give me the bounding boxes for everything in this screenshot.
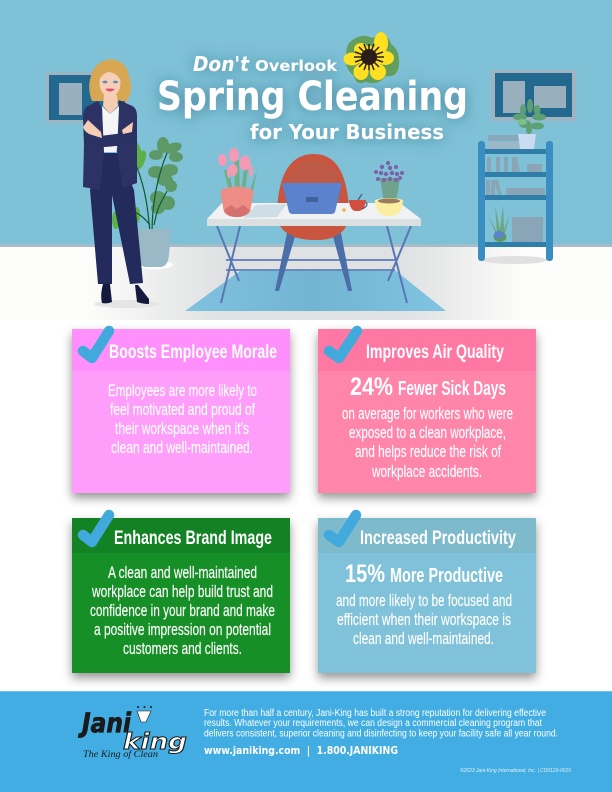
floor plant — [112, 137, 183, 269]
icon: laptop — [282, 183, 342, 214]
text block: a positive impression on potential — [94, 620, 271, 639]
text block: and helps reduce the risk of — [355, 442, 501, 461]
statistic — [345, 560, 503, 588]
room background — [0, 0, 612, 330]
company text: For more than half a century, Jani-King has built a strong reputation for delivering effective — [204, 708, 546, 719]
statistic: 24% — [350, 373, 393, 401]
face — [100, 69, 120, 97]
text block — [90, 563, 275, 658]
text block: workplace can help build trust and — [91, 582, 273, 601]
text block — [108, 381, 257, 457]
title: Overlook — [255, 57, 338, 75]
copyright: ©2023 Jani-King International, Inc. | CD0129-0015 — [460, 767, 571, 774]
panel header — [318, 329, 536, 371]
woman character — [83, 59, 160, 308]
statistic — [350, 373, 506, 401]
company text: delivers consistent, superior cleaning and disinfecting to keep your facility safe all year round. — [204, 728, 558, 740]
text block: workplace accidents. — [371, 462, 482, 481]
text block: and more likely to be focused and — [336, 591, 512, 610]
heading: Boosts Employee Morale — [109, 341, 277, 363]
neck — [103, 95, 118, 114]
panel: enhances brand image — [72, 515, 290, 673]
text block: feel motivated and proud of — [110, 400, 255, 419]
icon: tulip pot — [218, 148, 257, 217]
statistic: 15% — [345, 560, 385, 588]
statistic: Fewer Sick Days — [398, 378, 506, 400]
jacket — [83, 100, 137, 190]
text block — [336, 591, 512, 648]
logo: Jani-King: The King of Clean — [83, 749, 158, 760]
shirt — [102, 106, 119, 152]
text block: their workspace when it’s — [115, 419, 249, 438]
shelf unit — [478, 134, 553, 264]
company text — [204, 708, 558, 740]
company text: results. Whatever your requirements, we can design a commercial cleaning program that — [204, 718, 542, 729]
text block: confidence in your brand and make — [90, 601, 275, 620]
icon: checkmark — [83, 331, 109, 358]
framed board right — [491, 70, 576, 121]
icon: checkmark — [329, 331, 357, 358]
rug — [185, 271, 446, 311]
crossed arms — [84, 124, 137, 147]
title: for Your Business — [250, 120, 444, 144]
panel header — [72, 518, 290, 553]
hair — [89, 59, 131, 101]
heading: Improves Air Quality — [366, 341, 504, 363]
text block: clean and well-maintained. — [111, 438, 253, 457]
icon: lavender pot — [374, 161, 404, 216]
footer band — [0, 691, 612, 792]
icon: tea cup — [342, 194, 367, 212]
panel header — [72, 329, 290, 371]
text block: on average for workers who were — [342, 404, 513, 423]
text block: A clean and well-maintained — [108, 563, 257, 582]
text block: exposed to a clean workplace, — [349, 423, 506, 442]
panel: boosts employee morale — [72, 329, 290, 493]
title — [157, 52, 468, 144]
panel header — [318, 518, 536, 553]
text block: clean and well-maintained. — [353, 629, 494, 648]
trousers — [90, 153, 143, 284]
text block: efficient when their workspace is — [337, 610, 511, 629]
framed board left — [46, 72, 128, 123]
logo: Jani-King: Jani — [78, 708, 132, 739]
title: Spring Cleaning — [157, 74, 468, 120]
heading: Enhances Brand Image — [114, 527, 272, 549]
title: Don't — [193, 52, 250, 76]
logo: Jani-King: king — [123, 730, 187, 755]
text block — [342, 404, 513, 481]
text block: customers and clients. — [123, 639, 242, 658]
statistic: More Productive — [390, 565, 503, 587]
panel: increased productivity — [318, 515, 536, 673]
heading: Increased Productivity — [360, 527, 516, 549]
icon: checkmark — [329, 515, 356, 542]
text block: Employees are more likely to — [108, 381, 257, 400]
panel: improves air quality — [318, 329, 536, 493]
desk — [207, 154, 421, 303]
shoes — [101, 284, 149, 304]
contact line: www.janiking.com | 1.800.JANIKING — [204, 745, 398, 757]
icon: flower — [344, 32, 399, 83]
logo: Jani-King — [78, 706, 187, 760]
icon: shelf plant — [513, 99, 546, 134]
icon: checkmark — [83, 515, 109, 542]
